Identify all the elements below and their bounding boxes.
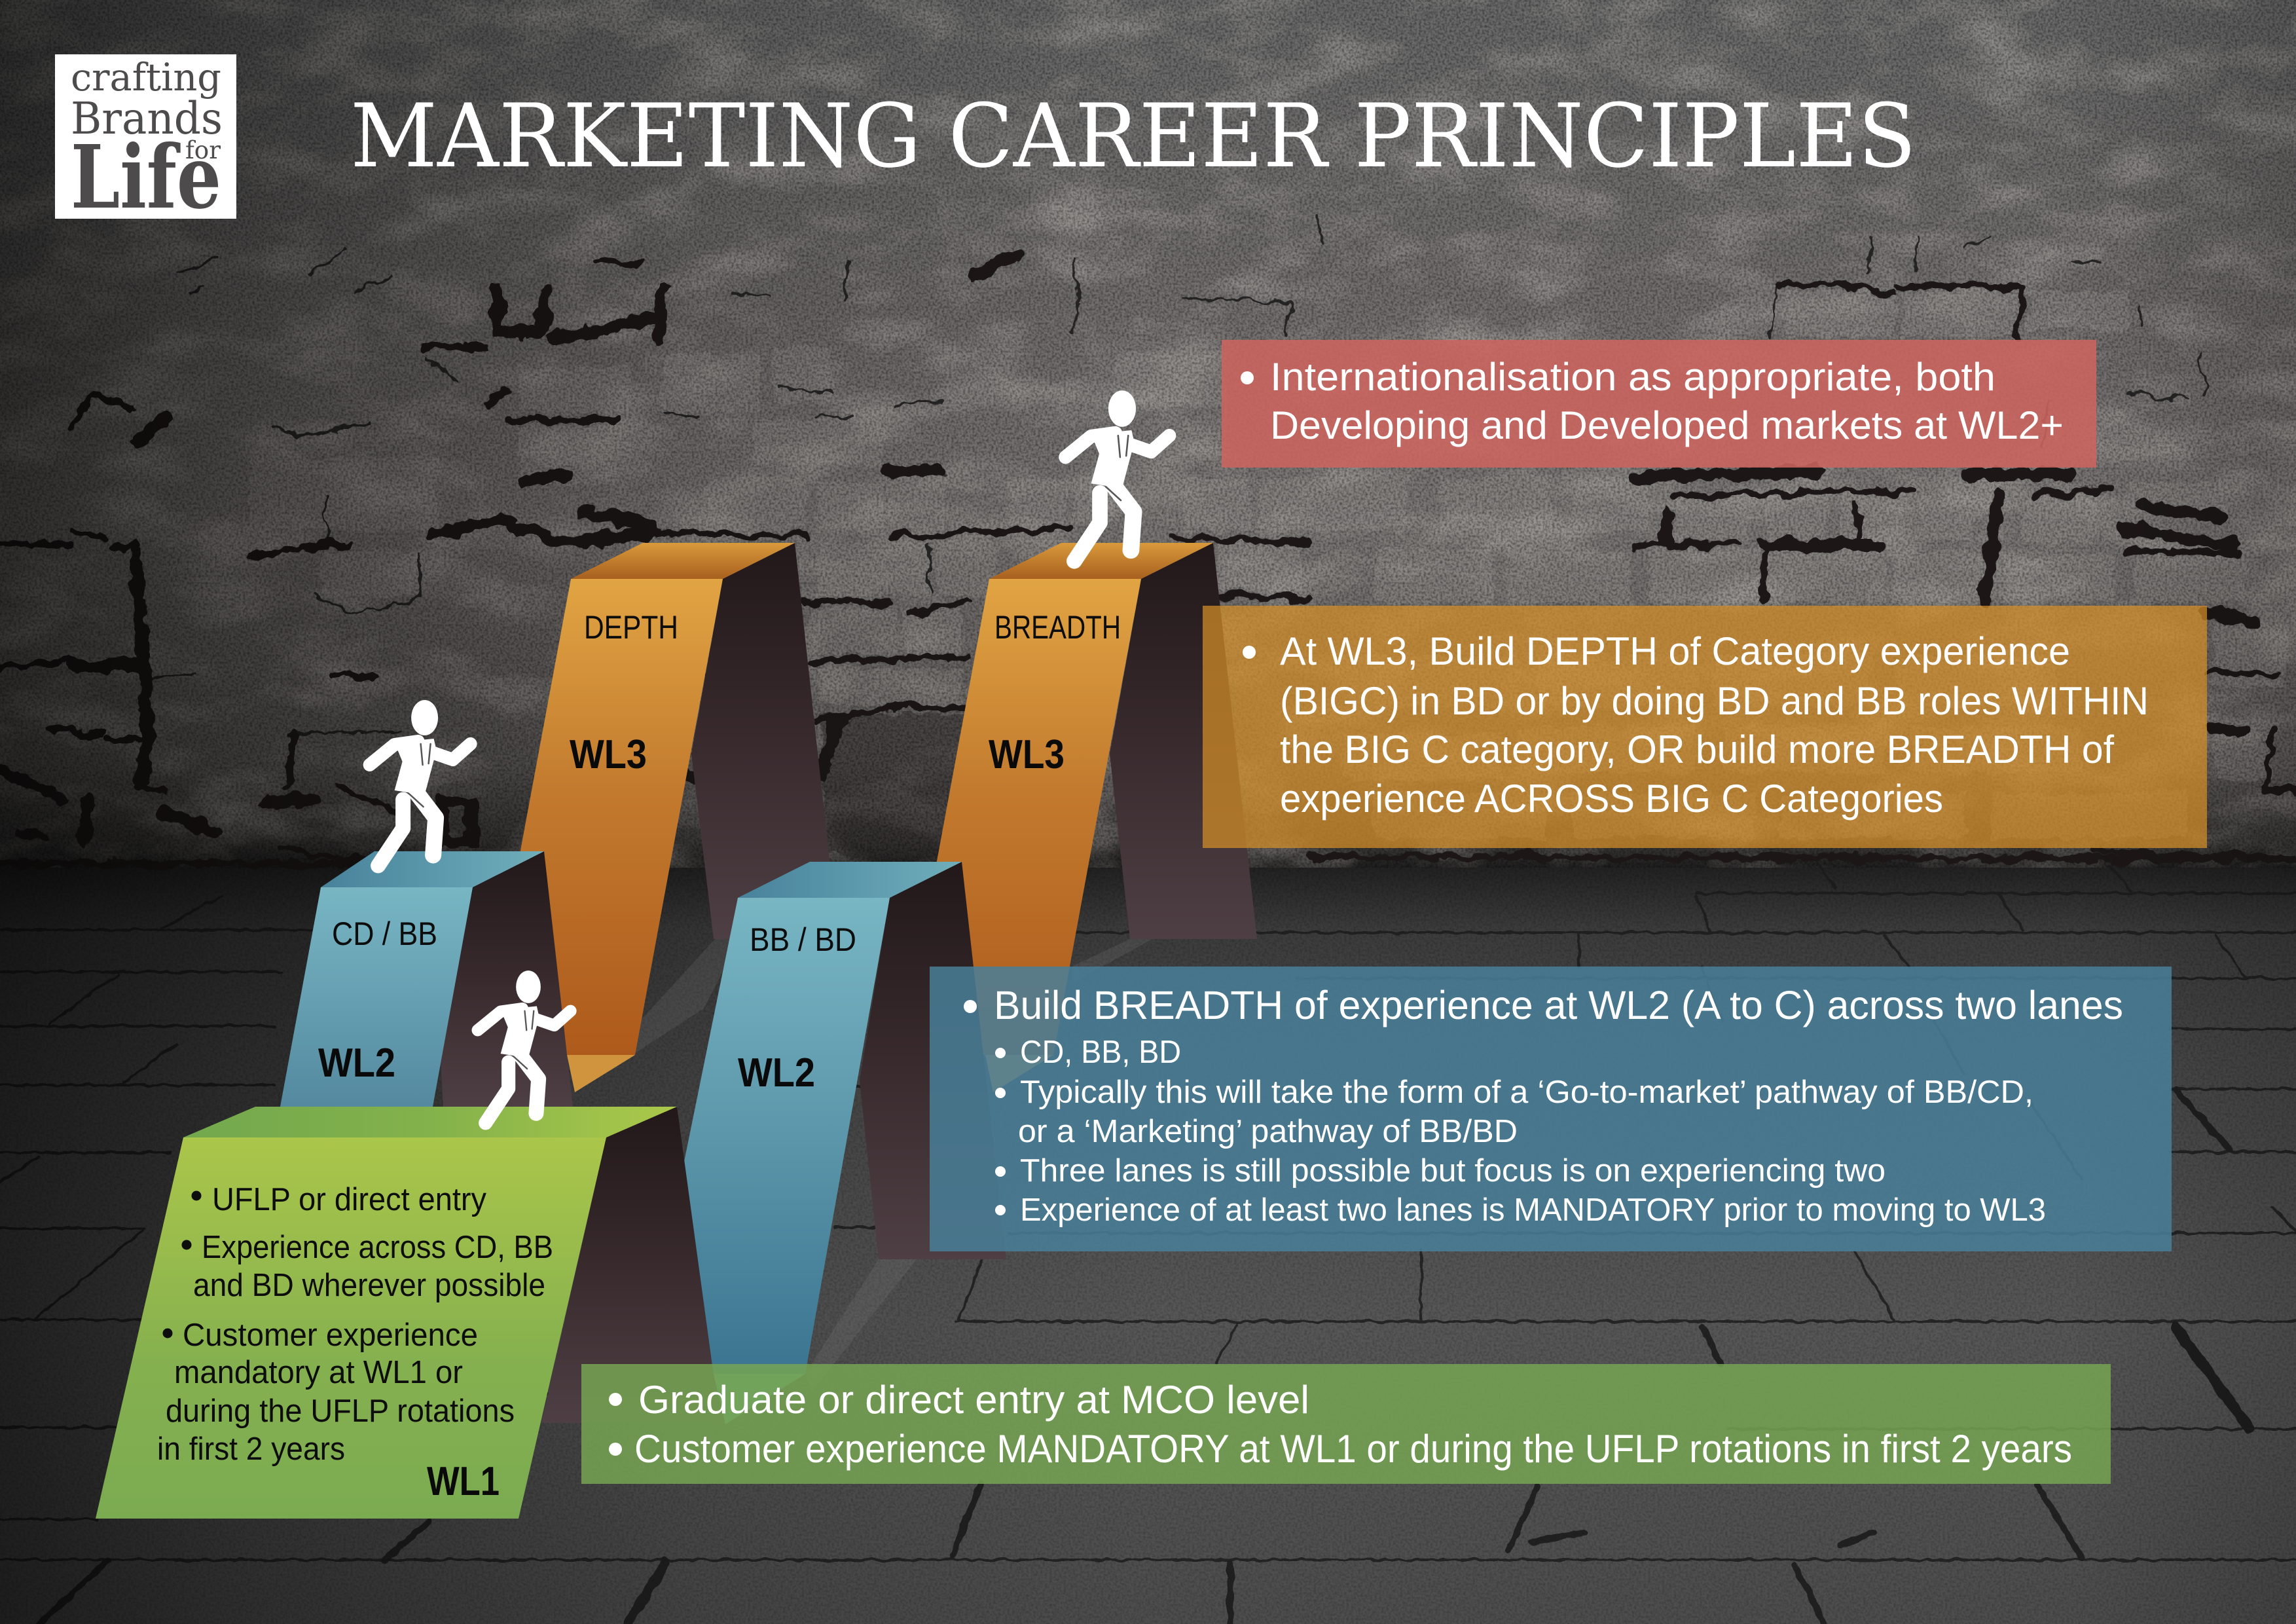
callout: entry (green): Graduate or direct entry at MCO level (638, 1378, 1309, 1422)
icon: runner on breadth (1065, 390, 1169, 561)
callout: internationalisation (red): Developing and Developed markets at WL2+ (1270, 403, 2064, 447)
callout: entry (green): Customer experience MANDATORY at WL1 or during the UFLP rotations in first 2 years (634, 1427, 2072, 1471)
callout: WL2 breadth (blue): CD, BB, BD (1020, 1035, 1181, 1070)
WL1 bullet list: Customer experience (183, 1318, 478, 1353)
callout: WL2 breadth (blue): or a ‘Marketing’ pathway of BB/BD (1018, 1114, 1518, 1149)
callout: WL3 depth or breadth (orange): At WL3, Build DEPTH of Category experience (1280, 629, 2070, 673)
label: BREADTH: BREADTH (994, 609, 1121, 646)
callout: WL2 breadth (blue): Three lanes is still possible but focus is on experiencing two (1020, 1153, 1886, 1189)
callout: WL2 breadth (blue): Build BREADTH of experience at WL2 (A to C) across two lanes (994, 983, 2123, 1027)
callout: WL3 depth or breadth (orange): (BIGC) in BD or by doing BD and BB roles WITHIN (1280, 679, 2149, 723)
WL1 bullet list: UFLP or direct entry (212, 1182, 486, 1217)
label: BB / BD: BB / BD (750, 921, 856, 958)
logo: crafting Brands for Life (55, 54, 236, 229)
label: WL1: WL1 (427, 1459, 500, 1504)
block: WL3 breadth (901, 543, 1257, 1092)
WL1 bullet list (157, 1182, 553, 1467)
callout: entry (green) (581, 1364, 2111, 1484)
label: CD / BB: CD / BB (332, 915, 437, 952)
label: DEPTH: DEPTH (584, 609, 678, 646)
block: WL3 depth (483, 543, 838, 1092)
title: MARKETING CAREER PRINCIPLES (350, 85, 1916, 187)
logo: crafting Brands for Life: crafting (71, 55, 221, 100)
label: WL3 breadth: WL3 (989, 732, 1065, 777)
callout: internationalisation (red): Internationalisation as appropriate, both (1270, 355, 1995, 399)
WL1 bullet list: Experience across CD, BB (202, 1230, 553, 1265)
block: WL2 CD / BB (280, 851, 573, 1107)
callout: WL2 breadth (blue): Experience of at least two lanes is MANDATORY prior to moving to WL3 (1020, 1192, 2046, 1228)
WL1 bullet list: in first 2 years (157, 1431, 345, 1467)
WL1 bullet list: during the UFLP rotations (166, 1393, 515, 1429)
callout: WL3 depth or breadth (orange): experience ACROSS BIG C Categories (1280, 777, 1943, 821)
logo: crafting Brands for Life: for (185, 136, 221, 164)
callout: WL3 depth or breadth (orange): the BIG C category, OR build more BREADTH of (1280, 728, 2114, 771)
label: WL3 depth: WL3 (570, 732, 647, 777)
block: WL2 BB / BD (641, 862, 1006, 1424)
logo: crafting Brands for Life: Life (71, 126, 221, 229)
WL1 bullet list: mandatory at WL1 or (174, 1355, 463, 1390)
WL1 bullet list: and BD wherever possible (193, 1268, 545, 1303)
floor shadows (575, 939, 1152, 1392)
callout: WL3 depth or breadth (orange) (1203, 606, 2207, 848)
icon: runner on CD / BB (370, 700, 471, 866)
callout: WL2 breadth (blue) (930, 967, 2172, 1251)
callout: WL2 breadth (blue): Typically this will take the form of a ‘Go-to-market’ pathway of BB/CD, (1020, 1075, 2033, 1110)
label: WL2 left: WL2 (318, 1041, 395, 1086)
logo: crafting Brands for Life: Brands (71, 93, 223, 144)
callout: internationalisation (red) (1222, 340, 2096, 468)
block: WL1 (96, 1107, 720, 1519)
icon: runner on WL1 (478, 970, 570, 1123)
label: WL2 right: WL2 (738, 1050, 815, 1096)
